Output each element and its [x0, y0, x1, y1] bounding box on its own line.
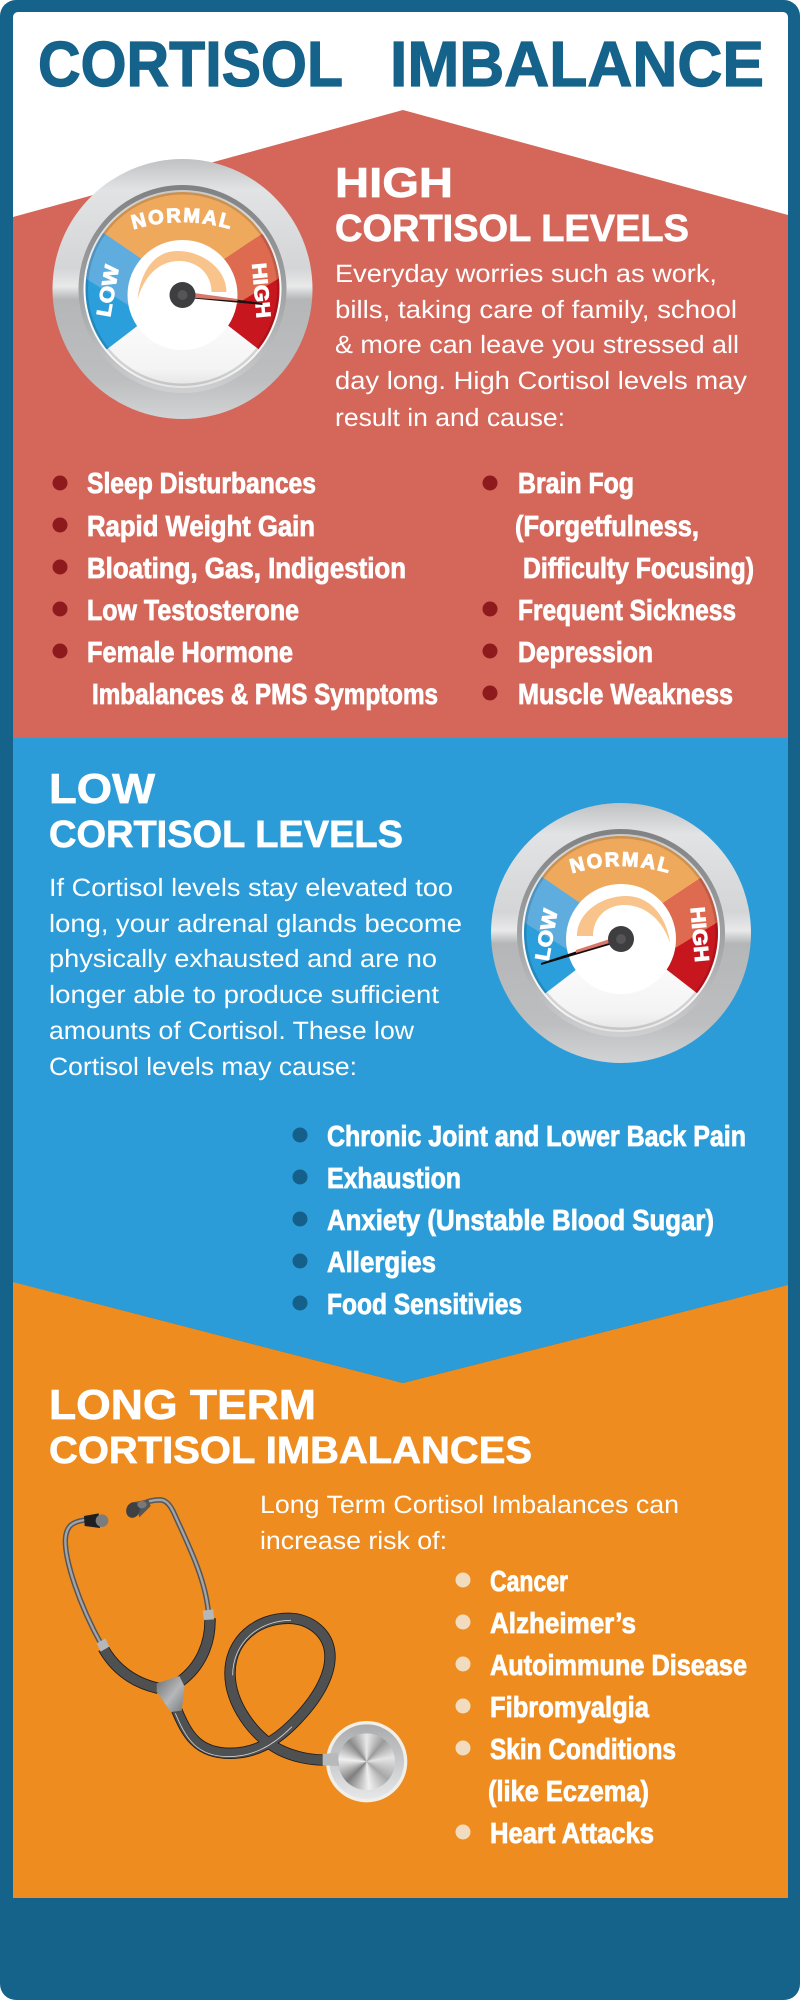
title: CORTISOL — [38, 28, 343, 100]
heading: low cortisol levels: LOW — [49, 765, 155, 812]
icon: stethoscope — [65, 1499, 407, 1802]
heading: high cortisol levels: CORTISOL LEVELS — [335, 208, 689, 250]
list: high cortisol symptoms right column — [482, 468, 754, 711]
list: high cortisol symptoms right column: Muscle Weakness — [518, 679, 733, 711]
text block: low cortisol description: physically exhausted and are no — [49, 945, 437, 973]
text block: high cortisol description: bills, taking care of family, school — [335, 296, 737, 324]
text block: high cortisol description: Everyday worries such as work, — [335, 260, 717, 288]
stethoscope chest piece — [323, 1721, 407, 1802]
text block: high cortisol description: result in and cause: — [335, 404, 565, 432]
list: low cortisol symptoms — [292, 1121, 746, 1321]
list: long term risks: Skin Conditions — [490, 1734, 676, 1766]
white title panel — [13, 12, 788, 312]
panel: low cortisol levels — [13, 738, 788, 1298]
list: low cortisol symptoms: Exhaustion — [327, 1163, 461, 1195]
text block: low cortisol description: longer able to produce sufficient — [49, 981, 439, 1009]
list: high cortisol symptoms right column: Difficulty Focusing) — [523, 553, 754, 585]
panel: long term cortisol imbalances — [13, 1282, 788, 1898]
text block: high cortisol description: & more can leave you stressed all — [335, 331, 739, 359]
text block: low cortisol description: Cortisol levels may cause: — [49, 1053, 357, 1081]
list: high cortisol symptoms right column: Depression — [518, 637, 653, 669]
text block: long term description: increase risk of: — [260, 1527, 447, 1555]
list: high cortisol symptoms left column — [52, 468, 438, 711]
icon: gauge reading high — [52, 159, 312, 419]
panel: high cortisol levels — [13, 110, 788, 740]
text block: low cortisol description: long, your adrenal glands become — [49, 910, 462, 938]
list: long term risks: (like Eczema) — [488, 1776, 649, 1808]
stethoscope ear tips — [84, 1499, 151, 1528]
blue chevron point — [13, 1270, 788, 1383]
icon: gauge reading high: NORMAL — [130, 208, 230, 230]
title: IMBALANCE — [390, 28, 764, 100]
list: high cortisol symptoms left column: Imbalances & PMS Symptoms — [92, 679, 438, 711]
text block: long term description: Long Term Cortisol Imbalances can — [260, 1491, 679, 1519]
list: long term risks: Alzheimer’s — [490, 1608, 636, 1640]
list: high cortisol symptoms right column: Brain Fog — [518, 468, 634, 500]
text block: low cortisol description: If Cortisol levels stay elevated too — [49, 874, 453, 902]
heading: high cortisol levels: HIGH — [335, 159, 453, 206]
list: high cortisol symptoms left column: Low Testosterone — [87, 595, 299, 627]
text block: high cortisol description: day long. High Cortisol levels may — [335, 367, 748, 395]
text block: low cortisol description — [49, 874, 462, 1081]
list: high cortisol symptoms left column: Female Hormone — [87, 637, 293, 669]
list: long term risks: Cancer — [490, 1566, 568, 1598]
heading: high cortisol levels — [335, 159, 689, 250]
icon: gauge reading low: HIGH — [686, 906, 712, 963]
heading: long term cortisol imbalances: CORTISOL IMBALANCES — [49, 1430, 532, 1472]
icon: gauge reading low: LOW — [532, 907, 562, 962]
list: low cortisol symptoms: Anxiety (Unstable Blood Sugar) — [327, 1205, 714, 1237]
stethoscope collars and yoke — [97, 1609, 214, 1712]
list: high cortisol symptoms right column: Frequent Sickness — [518, 595, 736, 627]
heading: long term cortisol imbalances: LONG TERM — [49, 1381, 316, 1428]
icon: gauge reading low: NORMAL — [569, 852, 669, 874]
icon: gauge reading high: LOW — [93, 263, 124, 318]
list: high cortisol symptoms left column: Rapid Weight Gain — [87, 511, 315, 543]
stethoscope metal ear tubes — [65, 1500, 208, 1645]
list: high cortisol symptoms left column: Bloating, Gas, Indigestion — [87, 553, 406, 585]
icon: gauge reading high: HIGH — [247, 262, 274, 319]
list: low cortisol symptoms: Allergies — [327, 1247, 436, 1279]
list: low cortisol symptoms: Food Sensitivies — [327, 1289, 522, 1321]
title — [38, 28, 764, 100]
list: long term risks: Fibromyalgia — [490, 1692, 650, 1724]
list: long term risks: Autoimmune Disease — [490, 1650, 747, 1682]
icon: gauge reading low — [491, 803, 751, 1063]
heading: low cortisol levels: CORTISOL LEVELS — [49, 814, 403, 856]
stethoscope rubber tubing — [103, 1618, 330, 1760]
list: long term risks: Heart Attacks — [490, 1818, 654, 1850]
list: long term risks — [456, 1566, 747, 1850]
list: high cortisol symptoms right column: (Forgetfulness, — [515, 511, 699, 543]
list: low cortisol symptoms: Chronic Joint and Lower Back Pain — [327, 1121, 746, 1153]
list: high cortisol symptoms left column: Sleep Disturbances — [87, 468, 316, 500]
heading: long term cortisol imbalances — [49, 1381, 532, 1472]
text block: high cortisol description — [335, 260, 748, 432]
text block: low cortisol description: amounts of Cortisol. These low — [49, 1017, 415, 1045]
heading: low cortisol levels — [49, 765, 403, 856]
text block: long term description — [260, 1491, 679, 1555]
